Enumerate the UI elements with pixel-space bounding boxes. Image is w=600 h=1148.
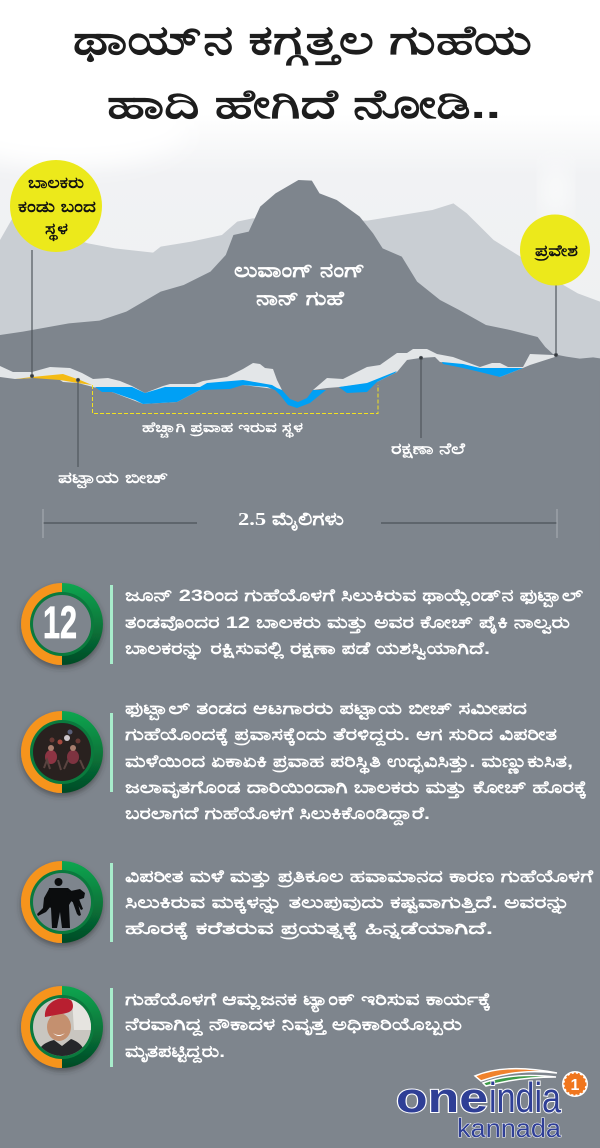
logo wordmark: one xyxy=(396,1074,488,1121)
logo: oneindia kannada xyxy=(396,1069,588,1143)
text: ಜಲಾವೃತಗೊಂಡ ದಾರಿಯಿಂದಾಗಿ ಬಾಲಕರು ಮತ್ತು ಕೋಚ್ ಹೊರಕ್ಕೆ xyxy=(125,778,587,799)
text: ಸಿಲುಕಿರುವ ಮಕ್ಕಳನ್ನು ತಲುಪುವುದು ಕಷ್ಟವಾಗುತ್ತಿದೆ. ಅವರನ್ನು xyxy=(125,893,570,915)
badge: 12: 12 xyxy=(43,597,77,648)
title xyxy=(73,17,532,127)
text xyxy=(125,586,583,661)
Pattaya beach sand xyxy=(15,374,92,385)
text: ಫುಟ್ಬಾಲ್ ತಂಡದ ಆಟಗಾರರು ಪಟ್ಟಾಯ ಬೀಚ್ ಸಮೀಪದ xyxy=(125,699,527,721)
text: ಬರಲಾಗದೆ ಗುಹೆಯೊಳಗೆ ಸಿಲುಕಿಕೊಂಡಿದ್ದಾರೆ. xyxy=(125,804,430,826)
callout: entrance xyxy=(520,214,590,286)
text: ಮಳೆಯಿಂದ ಏಕಾಏಕಿ ಪ್ರವಾಹ ಪರಿಸ್ಥಿತಿ ಉದ್ಭವಿಸಿತ್ತು. ಮಣ್ಣುಕುಸಿತ, xyxy=(125,752,573,775)
text xyxy=(125,699,587,826)
text: ಮೃತಪಟ್ಟಿದ್ದರು. xyxy=(125,1042,225,1064)
item 4: navy officer xyxy=(21,986,491,1068)
item 3: rescue difficulty xyxy=(21,861,595,943)
text xyxy=(125,867,595,940)
logo flag swooshes xyxy=(475,1069,557,1086)
main mountain and ground xyxy=(0,180,600,550)
item 1: twelve boys xyxy=(21,583,583,665)
text: ಜೂನ್ 23ರಿಂದ ಗುಹೆಯೊಳಗೆ ಸಿಲುಕಿರುವ ಥಾಯ್ಲೆಂಡ್‌ನ ಫುಟ್ಬಾಲ್ xyxy=(125,586,583,608)
logo badge: 1 xyxy=(571,1077,580,1094)
title: ಥಾಯ್‌ನ ಕಗ್ಗತ್ತಲ ಗುಹೆಯ xyxy=(73,17,532,66)
mountain name label: ಲುವಾಂಗ್ ನಂಗ್ xyxy=(234,260,365,282)
back mountain range xyxy=(0,203,600,370)
mountain name label: ನಾನ್ ಗುಹೆ xyxy=(256,288,345,310)
cave passage xyxy=(0,349,558,404)
callout: boys found: ಕಂಡು ಬಂದ xyxy=(18,199,96,216)
pointer lines xyxy=(30,250,558,467)
label: Pattaya beach: ಪಟ್ಟಾಯ ಬೀಚ್ xyxy=(58,470,168,490)
text: ಗುಹೆಯೊಳಗೆ ಆಮ್ಲಜನಕ ಟ್ಯಾಂಕ್ ಇರಿಸುವ ಕಾರ್ಯಕ್ಕೆ xyxy=(125,990,491,1013)
badge: rescuer silhouette xyxy=(21,861,103,943)
flood water xyxy=(95,362,523,408)
logo: oneindia kannada: kannada xyxy=(457,1113,562,1143)
callout: boys found: ಸ್ಥಳ xyxy=(45,221,68,242)
text: ನೆರವಾಗಿದ್ದ ನೌಕಾದಳ ನಿವೃತ್ತ ಅಧಿಕಾರಿಯೊಬ್ಬರು xyxy=(125,1015,463,1037)
callout: boys found xyxy=(10,160,102,252)
text: ಹೊರಕ್ಕೆ ಕರೆತರುವ ಪ್ರಯತ್ನಕ್ಕೆ ಹಿನ್ನಡೆಯಾಗಿದೆ. xyxy=(125,919,493,940)
text: ವಿಪರೀತ ಮಳೆ ಮತ್ತು ಪ್ರತಿಕೂಲ ಹವಾಮಾನದ ಕಾರಣ ಗುಹೆಯೊಳಗೆ xyxy=(125,867,595,888)
cave cross-section diagram xyxy=(0,160,600,550)
text: ಬಾಲಕರನ್ನು ರಕ್ಷಿಸುವಲ್ಲಿ ರಕ್ಷಣಾ ಪಡೆ ಯಶಸ್ವಿಯಾಗಿದೆ. xyxy=(125,639,490,661)
distance scale: 2.5 ಮೈಲಿಗಳು xyxy=(238,509,344,531)
label: flood zone: ಹೆಚ್ಚಾಗಿ ಪ್ರವಾಹ ಇರುವ ಸ್ಥಳ xyxy=(142,419,303,439)
badge: 12 xyxy=(21,583,103,665)
text xyxy=(125,990,491,1064)
logo badge xyxy=(562,1071,588,1097)
badge: officer portrait xyxy=(21,986,103,1068)
logo wordmark xyxy=(396,1074,562,1121)
mountain name label xyxy=(234,260,365,310)
callout: entrance: ಪ್ರವೇಶ xyxy=(533,243,578,262)
logo wordmark: india xyxy=(489,1074,562,1121)
badge: cave photo xyxy=(21,711,103,793)
text: ತಂಡವೊಂದರ 12 ಬಾಲಕರು ಮತ್ತು ಅವರ ಕೋಚ್ ಪೈಕಿ ನಾಲ್ವರು xyxy=(125,613,571,635)
item 2: trapped team xyxy=(21,699,587,826)
callout: boys found: ಬಾಲಕರು xyxy=(28,175,84,192)
title: ಹಾದಿ ಹೇಗಿದೆ ನೋಡಿ.. xyxy=(107,81,501,127)
flood zone dashed bracket xyxy=(92,385,378,414)
text: ಗುಹೆಯೊಂದಕ್ಕೆ ಪ್ರವಾಸಕ್ಕೆಂದು ತೆರಳಿದ್ದರು. ಆಗ ಸುರಿದ ವಿಪರೀತ xyxy=(125,725,557,747)
label: rescue base: ರಕ್ಷಣಾ ನೆಲೆ xyxy=(391,441,465,458)
